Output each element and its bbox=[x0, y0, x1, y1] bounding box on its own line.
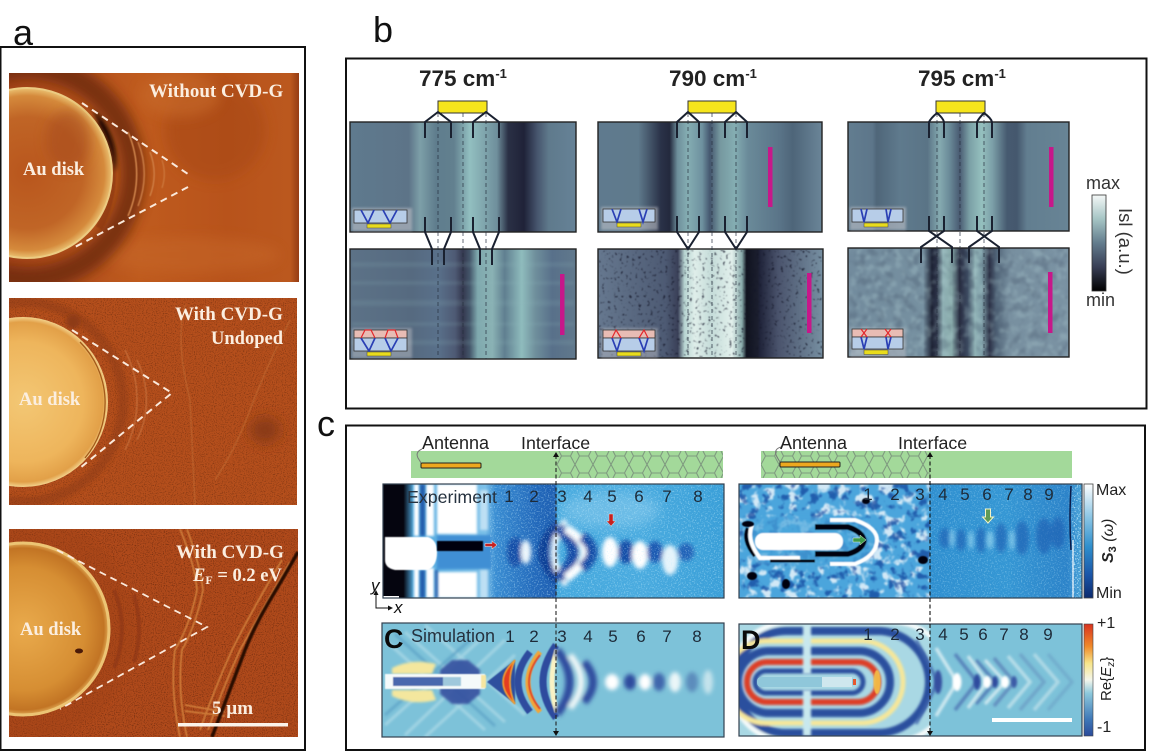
fringe numbers, simulation left: 7 bbox=[662, 627, 672, 646]
colorbar: Re{Ez} bbox=[1084, 615, 1117, 736]
scale bar 5 µm bbox=[178, 698, 288, 726]
ray connectors bbox=[425, 112, 999, 265]
inset 775 bottom bbox=[352, 328, 412, 358]
colorbar: Re{Ez}: z bbox=[1106, 662, 1117, 668]
image: with CVD-G undoped bbox=[9, 298, 297, 505]
panel label c: c bbox=[317, 403, 335, 444]
fringe numbers, experiment left: 1 bbox=[504, 487, 514, 506]
label: EF = 0.2 eV: E bbox=[192, 566, 205, 586]
colorbar: Re{Ez}: -1 bbox=[1097, 719, 1111, 736]
fringe numbers, experiment right: 6 bbox=[982, 485, 992, 504]
inset 790 bottom bbox=[601, 328, 658, 358]
fringe numbers, experiment right: 2 bbox=[890, 485, 900, 504]
panel c: antenna launched plasmons bbox=[346, 426, 1145, 750]
image: 775 bottom bbox=[350, 249, 576, 359]
inset 790 top bbox=[601, 207, 658, 230]
colorbar: |s|: min bbox=[1086, 290, 1115, 310]
heading 775: -1 bbox=[495, 66, 507, 81]
schematic right: antenna and graphene: Interface bbox=[898, 433, 967, 453]
fringe numbers, experiment right: 7 bbox=[1004, 485, 1014, 504]
fringe numbers, simulation right: 4 bbox=[938, 625, 948, 644]
fringe numbers, experiment right: 9 bbox=[1044, 485, 1054, 504]
red arrow: propagation bbox=[485, 541, 497, 549]
fringe numbers, experiment left: 5 bbox=[607, 487, 617, 506]
fringe numbers, experiment left: 2 bbox=[529, 487, 539, 506]
colorbar: |s|: Isl (a.u.) bbox=[1115, 208, 1136, 275]
antenna 775 bbox=[438, 101, 487, 113]
dashed cone bbox=[75, 103, 188, 247]
colorbar: |s| bbox=[1086, 173, 1136, 310]
schematic right: antenna and graphene: Antenna bbox=[780, 433, 848, 453]
fringe numbers, simulation left: 6 bbox=[636, 627, 646, 646]
antenna 790 bbox=[688, 101, 736, 113]
fringe numbers, simulation right: 1 bbox=[863, 625, 873, 644]
label D: D bbox=[741, 625, 760, 655]
fringe numbers, experiment left: 7 bbox=[662, 487, 672, 506]
fringe numbers, simulation left bbox=[505, 627, 702, 646]
axes xy: x bbox=[393, 598, 403, 617]
heading 790: -1 bbox=[745, 66, 757, 81]
image: without CVD-G bbox=[9, 73, 299, 282]
experiment image left bbox=[384, 484, 724, 598]
experiment image right bbox=[740, 484, 1082, 598]
panel label a: a bbox=[13, 12, 34, 53]
axes xy: y bbox=[370, 576, 381, 595]
scale bar 5 µm: 5 µm bbox=[212, 698, 253, 719]
fringe numbers, experiment right: 4 bbox=[938, 485, 948, 504]
dashed guide lines bbox=[438, 113, 984, 359]
fringe numbers, experiment right: 3 bbox=[915, 485, 925, 504]
simulation image right bbox=[740, 624, 1082, 736]
label: Without CVD-G: Without CVD-G bbox=[149, 81, 283, 102]
schematic left: antenna and graphene: Interface bbox=[521, 433, 590, 453]
heading 795: 795 cm bbox=[918, 66, 994, 91]
inset 795 bottom bbox=[850, 328, 906, 357]
red arrow: fringes bbox=[606, 514, 616, 526]
fringe numbers, experiment right: 1 bbox=[863, 485, 873, 504]
fringe numbers, simulation left: 1 bbox=[505, 627, 515, 646]
image: 795 bottom bbox=[848, 248, 1069, 357]
fringe numbers, experiment right: 5 bbox=[960, 485, 970, 504]
colorbar: |s|: max bbox=[1086, 173, 1120, 193]
heading 795: -1 bbox=[994, 66, 1006, 81]
image: 795 top bbox=[848, 122, 1069, 231]
fringe numbers, simulation right: 6 bbox=[978, 625, 988, 644]
image: with CVD-G EF 0.2 eV bbox=[9, 529, 298, 737]
simulation image left bbox=[382, 624, 724, 736]
colorbar: Re{Ez}: +1 bbox=[1097, 615, 1115, 632]
axes xy bbox=[370, 576, 403, 617]
label: Au disk: Au disk bbox=[23, 160, 85, 180]
fringe numbers, simulation right: 8 bbox=[1019, 625, 1029, 644]
label Experiment: Experiment bbox=[407, 487, 497, 507]
fringe numbers, experiment right: 8 bbox=[1023, 485, 1033, 504]
label C: C bbox=[384, 624, 404, 654]
label: With CVD-G: With CVD-G bbox=[176, 542, 284, 563]
fringe numbers, experiment right bbox=[863, 485, 1054, 504]
yellow-green arrow: fringes bbox=[982, 509, 994, 523]
schematic left: antenna and graphene: Antenna bbox=[422, 433, 490, 453]
fringe numbers, simulation right bbox=[863, 625, 1053, 644]
dashed cone bbox=[72, 330, 172, 468]
colorbar: S3: (ω) bbox=[1100, 519, 1117, 546]
fringe numbers, simulation right: 5 bbox=[959, 625, 969, 644]
colorbar: S3: 3 bbox=[1107, 546, 1119, 552]
fringe numbers, experiment left: 4 bbox=[583, 487, 593, 506]
heading 775: 775 cm bbox=[419, 66, 495, 91]
fringe numbers, experiment left: 8 bbox=[693, 487, 703, 506]
fringe numbers, simulation left: 8 bbox=[692, 627, 702, 646]
label: EF = 0.2 eV: = 0.2 eV bbox=[213, 566, 282, 586]
inset 795 top bbox=[850, 207, 906, 230]
dashed cone bbox=[57, 550, 207, 709]
panel label b: b bbox=[373, 9, 393, 50]
schematic right: antenna and graphene bbox=[761, 433, 1072, 478]
magenta scale bars bbox=[560, 147, 1054, 335]
fringe numbers, simulation left: 3 bbox=[557, 627, 567, 646]
fringe numbers, experiment left bbox=[504, 487, 703, 506]
colorbar: S3: Max bbox=[1096, 482, 1126, 499]
label: Au disk: Au disk bbox=[20, 620, 82, 640]
schematic left: antenna and graphene bbox=[411, 433, 723, 478]
heading 790: 790 cm bbox=[669, 66, 745, 91]
inset 775 top bbox=[352, 208, 412, 231]
label: Au disk: Au disk bbox=[19, 390, 81, 410]
image: 790 bottom bbox=[598, 249, 823, 358]
colorbar: S3: S bbox=[1100, 552, 1117, 563]
image: 775 top bbox=[350, 122, 576, 232]
green arrow: propagation bbox=[853, 535, 866, 545]
antenna 795 bbox=[936, 101, 985, 113]
fringe numbers, simulation right: 9 bbox=[1043, 625, 1053, 644]
colorbar: S3 bbox=[1084, 482, 1126, 602]
fringe numbers, simulation right: 2 bbox=[890, 625, 900, 644]
interface line right bbox=[927, 452, 933, 736]
label Simulation: Simulation bbox=[411, 626, 495, 646]
fringe numbers, simulation right: 7 bbox=[999, 625, 1009, 644]
label: With CVD-G: With CVD-G bbox=[175, 304, 283, 325]
colorbar: Re{Ez}: } bbox=[1098, 657, 1115, 662]
label: EF = 0.2 eV: F bbox=[205, 573, 213, 587]
fringe numbers, simulation right: 3 bbox=[915, 625, 925, 644]
panel a: near-field images of Au disk bbox=[0, 47, 305, 750]
label: Undoped: Undoped bbox=[211, 329, 284, 349]
fringe numbers, simulation left: 2 bbox=[529, 627, 539, 646]
image: 790 top bbox=[598, 122, 822, 232]
fringe numbers, simulation left: 5 bbox=[608, 627, 618, 646]
fringe numbers, experiment left: 6 bbox=[634, 487, 644, 506]
panel b: frequency-dependent images bbox=[346, 58, 1146, 408]
fringe numbers, simulation left: 4 bbox=[583, 627, 593, 646]
colorbar: S3: Min bbox=[1096, 585, 1122, 602]
interface line left bbox=[553, 452, 559, 736]
colorbar: Re{Ez}: Re{E bbox=[1098, 667, 1115, 701]
fringe numbers, experiment left: 3 bbox=[557, 487, 567, 506]
